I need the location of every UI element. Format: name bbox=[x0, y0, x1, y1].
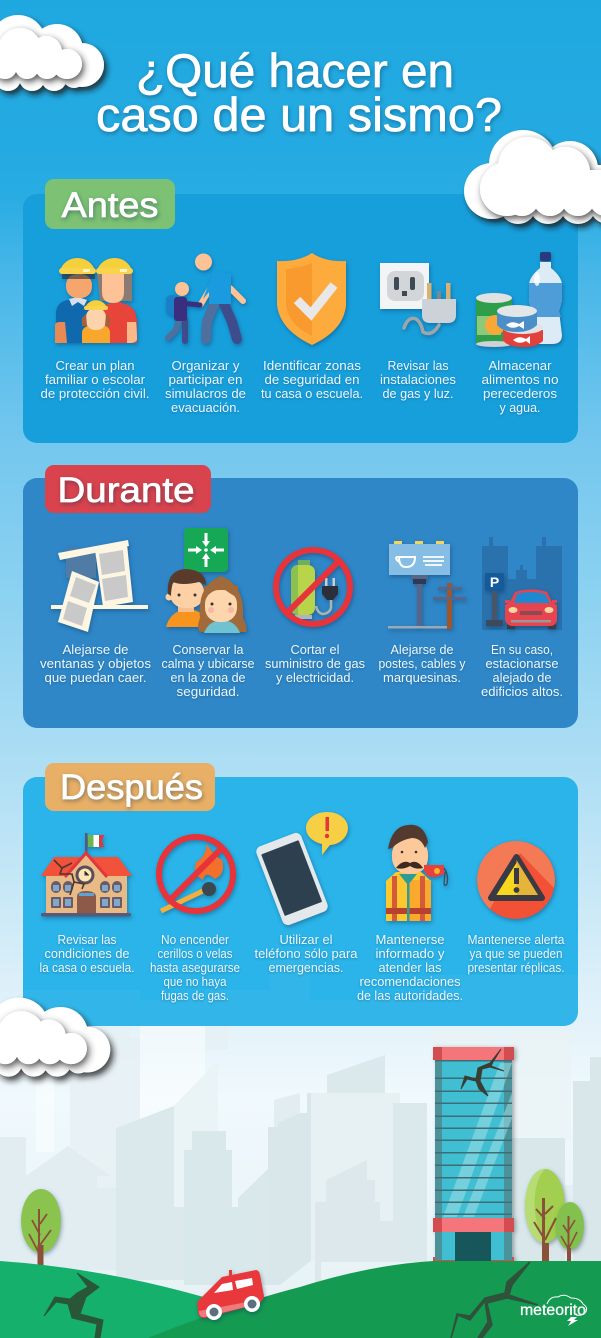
text: mantenerse alerta: presentar réplicas. bbox=[468, 961, 564, 975]
text: estacionarse: alejado de bbox=[492, 671, 552, 685]
text: cortar suministro bbox=[265, 643, 365, 685]
text: revisar condiciones: Revisar las bbox=[58, 933, 116, 947]
title: ¿Qué hacer en bbox=[136, 44, 454, 97]
text: mantenerse alerta: ya que se pueden bbox=[470, 947, 563, 961]
text: utilizar telefono: Utilizar el bbox=[280, 933, 332, 947]
crack: left bbox=[44, 1273, 103, 1338]
icon: billboard and utility pole bbox=[388, 541, 466, 629]
text: alejarse de ventanas: que puedan caer. bbox=[44, 671, 146, 685]
text: no encender: hasta asegurarse bbox=[150, 961, 240, 975]
text: organizar simulacros: Organizar y bbox=[172, 359, 240, 373]
text: cortar suministro: y electricidad. bbox=[276, 671, 354, 685]
text: crear un plan: Crear un plan bbox=[56, 359, 135, 373]
panel: despues bbox=[23, 763, 578, 1026]
heading: durante bbox=[45, 465, 211, 513]
text: almacenar alimentos: perecederos bbox=[483, 387, 557, 401]
background city skyline bbox=[0, 990, 601, 1290]
car bbox=[197, 1270, 264, 1320]
heading: despues bbox=[45, 763, 215, 811]
text: crear un plan: familiar o escolar bbox=[45, 373, 145, 387]
text: conservar la calma: en la zona de bbox=[170, 671, 246, 685]
text: cortar suministro: Cortar el bbox=[290, 643, 340, 657]
trees: right bbox=[525, 1169, 584, 1267]
text: alejarse de postes: postes, cables y bbox=[378, 657, 466, 671]
text: revisar instalaciones bbox=[380, 359, 456, 401]
text: estacionarse: edificios altos. bbox=[481, 685, 563, 699]
text: utilizar telefono: emergencias. bbox=[268, 961, 344, 975]
heading: durante: Durante bbox=[58, 471, 194, 510]
text: almacenar alimentos: Almacenar bbox=[488, 359, 552, 373]
text: almacenar alimentos: y agua. bbox=[500, 401, 540, 415]
text: utilizar telefono: teléfono sólo para bbox=[254, 947, 358, 961]
text: crear un plan: de protección civil. bbox=[40, 387, 150, 401]
text: identificar zonas: de seguridad en bbox=[264, 373, 360, 387]
text: mantenerse alerta bbox=[468, 933, 565, 975]
icon: warning triangle bbox=[477, 841, 555, 919]
text: alejarse de postes: marquesinas. bbox=[383, 671, 461, 685]
text: organizar simulacros bbox=[165, 359, 246, 415]
icon: damaged school bbox=[41, 833, 132, 916]
text: mantenerse informado: recomendaciones bbox=[360, 975, 460, 989]
cracked glass tower bbox=[433, 1047, 514, 1263]
text: organizar simulacros: simulacros de bbox=[165, 387, 246, 401]
text: almacenar alimentos: alimentos no bbox=[482, 373, 559, 387]
text: conservar la calma: Conservar la bbox=[172, 643, 244, 657]
text: revisar instalaciones: de gas y luz. bbox=[382, 387, 454, 401]
cloud: top left bbox=[0, 15, 104, 91]
text: estacionarse: estacionarse bbox=[486, 657, 559, 671]
crack: right bbox=[451, 1262, 538, 1338]
text: alejarse de postes bbox=[378, 643, 466, 685]
text: mantenerse informado: de las autoridades. bbox=[357, 989, 463, 1003]
icon: family with hard hats bbox=[55, 258, 137, 343]
text: utilizar telefono bbox=[254, 933, 358, 975]
heading: antes bbox=[45, 179, 175, 229]
title bbox=[96, 44, 502, 141]
panel: antes bbox=[23, 179, 578, 443]
panel: durante bbox=[23, 465, 578, 728]
title: caso de un sismo? bbox=[96, 88, 502, 141]
text: mantenerse alerta: Mantenerse alerta bbox=[468, 933, 565, 947]
text: conservar la calma bbox=[162, 643, 255, 699]
icon: safety shield bbox=[277, 253, 346, 345]
text: mantenerse informado bbox=[357, 933, 463, 1003]
text: organizar simulacros: participar en bbox=[168, 373, 243, 387]
heading: despues: Después bbox=[60, 768, 203, 807]
text: crear un plan bbox=[40, 359, 150, 401]
text: identificar zonas: Identificar zonas bbox=[263, 359, 361, 373]
cloud: top right bbox=[464, 130, 601, 224]
text: alejarse de postes: Alejarse de bbox=[390, 643, 454, 657]
text: conservar la calma: calma y ubicarse bbox=[162, 657, 255, 671]
text: identificar zonas bbox=[261, 359, 363, 401]
text: alejarse de ventanas bbox=[40, 643, 151, 685]
text: identificar zonas: tu casa o escuela. bbox=[261, 387, 363, 401]
text: alejarse de ventanas: Alejarse de bbox=[62, 643, 129, 657]
icon: parked car and tall buildings: P bbox=[490, 574, 499, 590]
text: no encender: que no haya bbox=[164, 975, 227, 989]
icon: safe zone sign and two people bbox=[166, 528, 247, 633]
text: revisar condiciones: la casa o escuela. bbox=[40, 961, 134, 975]
heading: antes: Antes bbox=[62, 186, 158, 225]
text: alejarse de ventanas: ventanas y objetos bbox=[40, 657, 151, 671]
icon: outlet and plug bbox=[380, 263, 456, 333]
icon: no gas and electricity bbox=[276, 550, 350, 624]
text: no encender: cerillos o velas bbox=[158, 947, 232, 961]
text: no encender: No encender bbox=[161, 933, 229, 947]
text: organizar simulacros: evacuación. bbox=[171, 401, 240, 415]
text: mantenerse informado: atender las bbox=[378, 961, 442, 975]
text: estacionarse: En su caso, bbox=[491, 643, 553, 657]
text: revisar instalaciones: instalaciones bbox=[380, 373, 456, 387]
text: revisar instalaciones: Revisar las bbox=[388, 359, 448, 373]
icon: smartphone with alert bubble bbox=[255, 812, 348, 927]
icon: adult and child evacuating bbox=[166, 254, 243, 341]
text: conservar la calma: seguridad. bbox=[176, 685, 240, 699]
text: no encender: fugas de gas. bbox=[161, 989, 229, 1003]
text: revisar condiciones bbox=[40, 933, 134, 975]
logo: meteorito bbox=[520, 1295, 587, 1326]
text: cortar suministro: suministro de gas bbox=[265, 657, 365, 671]
logo: meteorito: meteorito bbox=[520, 1302, 586, 1319]
text: revisar condiciones: condiciones de bbox=[44, 947, 130, 961]
text: estacionarse bbox=[481, 643, 563, 699]
icon: falling windows bbox=[51, 540, 148, 632]
tree: left bbox=[21, 1189, 61, 1272]
icon: canned food and water bottle bbox=[476, 252, 562, 347]
text: mantenerse informado: informado y bbox=[376, 947, 445, 961]
icon: man with safety vest and whistle bbox=[386, 825, 448, 921]
icon: parked car and tall buildings bbox=[482, 537, 562, 630]
text: mantenerse informado: Mantenerse bbox=[376, 933, 445, 947]
text: no encender bbox=[150, 933, 240, 1003]
icon: no fire or matches bbox=[159, 837, 233, 911]
ground: hills bbox=[0, 1261, 601, 1338]
text: almacenar alimentos bbox=[482, 359, 559, 415]
cloud: lower left bbox=[0, 998, 110, 1077]
